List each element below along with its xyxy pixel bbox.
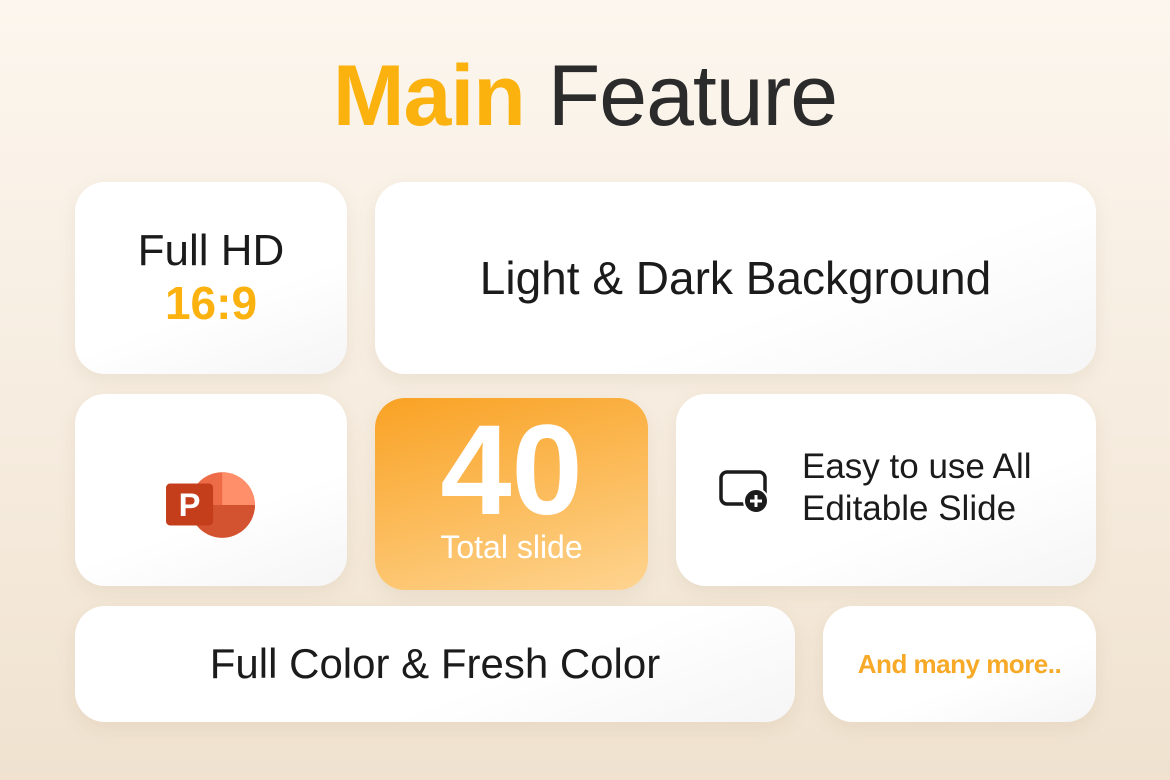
panel: full hd: 16:9 — [165, 277, 257, 329]
panel: full color: Full Color & Fresh Color — [210, 640, 660, 687]
panel: and many more — [823, 606, 1096, 722]
panel: powerpoint — [75, 394, 347, 586]
panel: easy to use: Editable Slide — [802, 489, 1016, 528]
panel: 40 total slide — [375, 398, 648, 590]
panel: easy to use: Easy to use All — [802, 447, 1032, 486]
panel: 40 total slide: 40 — [440, 399, 583, 542]
panel: full color — [75, 606, 795, 722]
title: Main Feature — [333, 48, 837, 144]
panel: 40 total slide: Total slide — [440, 529, 583, 565]
panel: and many more: And many more.. — [858, 648, 1061, 678]
panel: full hd: Full HD — [138, 226, 284, 275]
panel: light dark: Light & Dark Background — [480, 252, 991, 304]
icon: add slide — [719, 470, 767, 512]
panel: full hd — [75, 182, 347, 374]
icon: powerpoint — [166, 472, 255, 538]
icon: powerpoint: P — [179, 486, 200, 523]
panel: light dark — [375, 182, 1096, 374]
panel: easy to use — [676, 394, 1096, 586]
